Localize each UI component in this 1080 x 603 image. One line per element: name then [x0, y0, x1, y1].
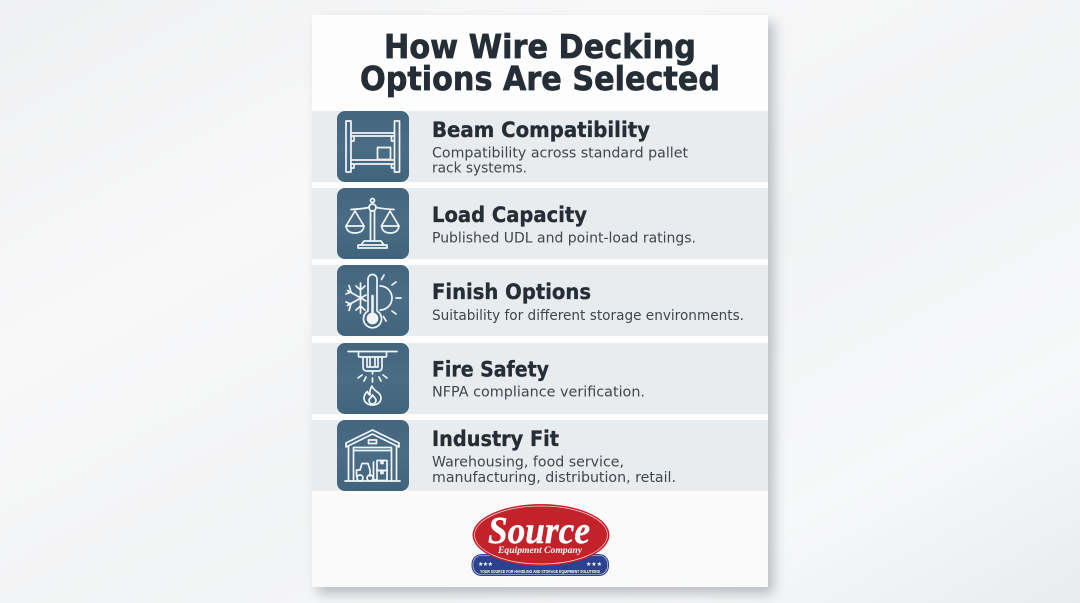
- description: load capacity: Published UDL and point-load ratings.: [432, 230, 696, 246]
- icon: balance scale: [337, 188, 409, 259]
- description: industry fit: [432, 454, 676, 486]
- title: [360, 27, 720, 98]
- heading: load capacity: Load Capacity: [432, 203, 587, 227]
- title: How Wire Decking: [384, 27, 696, 66]
- heading: industry fit: Industry Fit: [432, 427, 559, 451]
- row: load capacity: [312, 188, 768, 259]
- icon: sprinkler and flame: [337, 343, 409, 414]
- heading: finish options: Finish Options: [432, 280, 591, 304]
- icon: warehouse with forklift: [337, 420, 409, 491]
- description: finish options: Suitability for different storage environments.: [432, 308, 744, 324]
- description: beam compatibility: Compatibility across standard pallet: [432, 146, 689, 162]
- heading: beam compatibility: Beam Compatibility: [432, 118, 650, 142]
- description: industry fit: manufacturing, distribution, retail.: [432, 470, 676, 486]
- row: fire safety: [312, 343, 768, 414]
- logo: Source Equipment Company: ★★★: [478, 561, 493, 568]
- logo: Source Equipment Company: YOUR SOURCE FOR HANDLING AND STORAGE EQUIPMENT SOLUTIONS: [480, 569, 600, 574]
- icon: thermometer with snowflake and sun: [337, 265, 409, 336]
- logo: Source Equipment Company: Source: [488, 510, 590, 552]
- panel: infographic card: [312, 15, 768, 587]
- title: Options Are Selected: [360, 59, 720, 98]
- logo: Source Equipment Company: Equipment Company: [497, 545, 583, 555]
- description: beam compatibility: rack systems.: [432, 160, 527, 176]
- icon: pallet rack: [337, 111, 409, 182]
- logo: Source Equipment Company: [472, 504, 610, 576]
- row: finish options: [312, 265, 768, 336]
- description: fire safety: NFPA compliance verification.: [432, 384, 645, 400]
- logo: Source Equipment Company: ★★★: [586, 561, 602, 568]
- description: industry fit: Warehousing, food service,: [432, 454, 624, 470]
- row: beam compatibility: [312, 111, 768, 182]
- row: industry fit: [312, 420, 768, 491]
- heading: fire safety: Fire Safety: [432, 358, 549, 382]
- description: beam compatibility: [432, 146, 689, 176]
